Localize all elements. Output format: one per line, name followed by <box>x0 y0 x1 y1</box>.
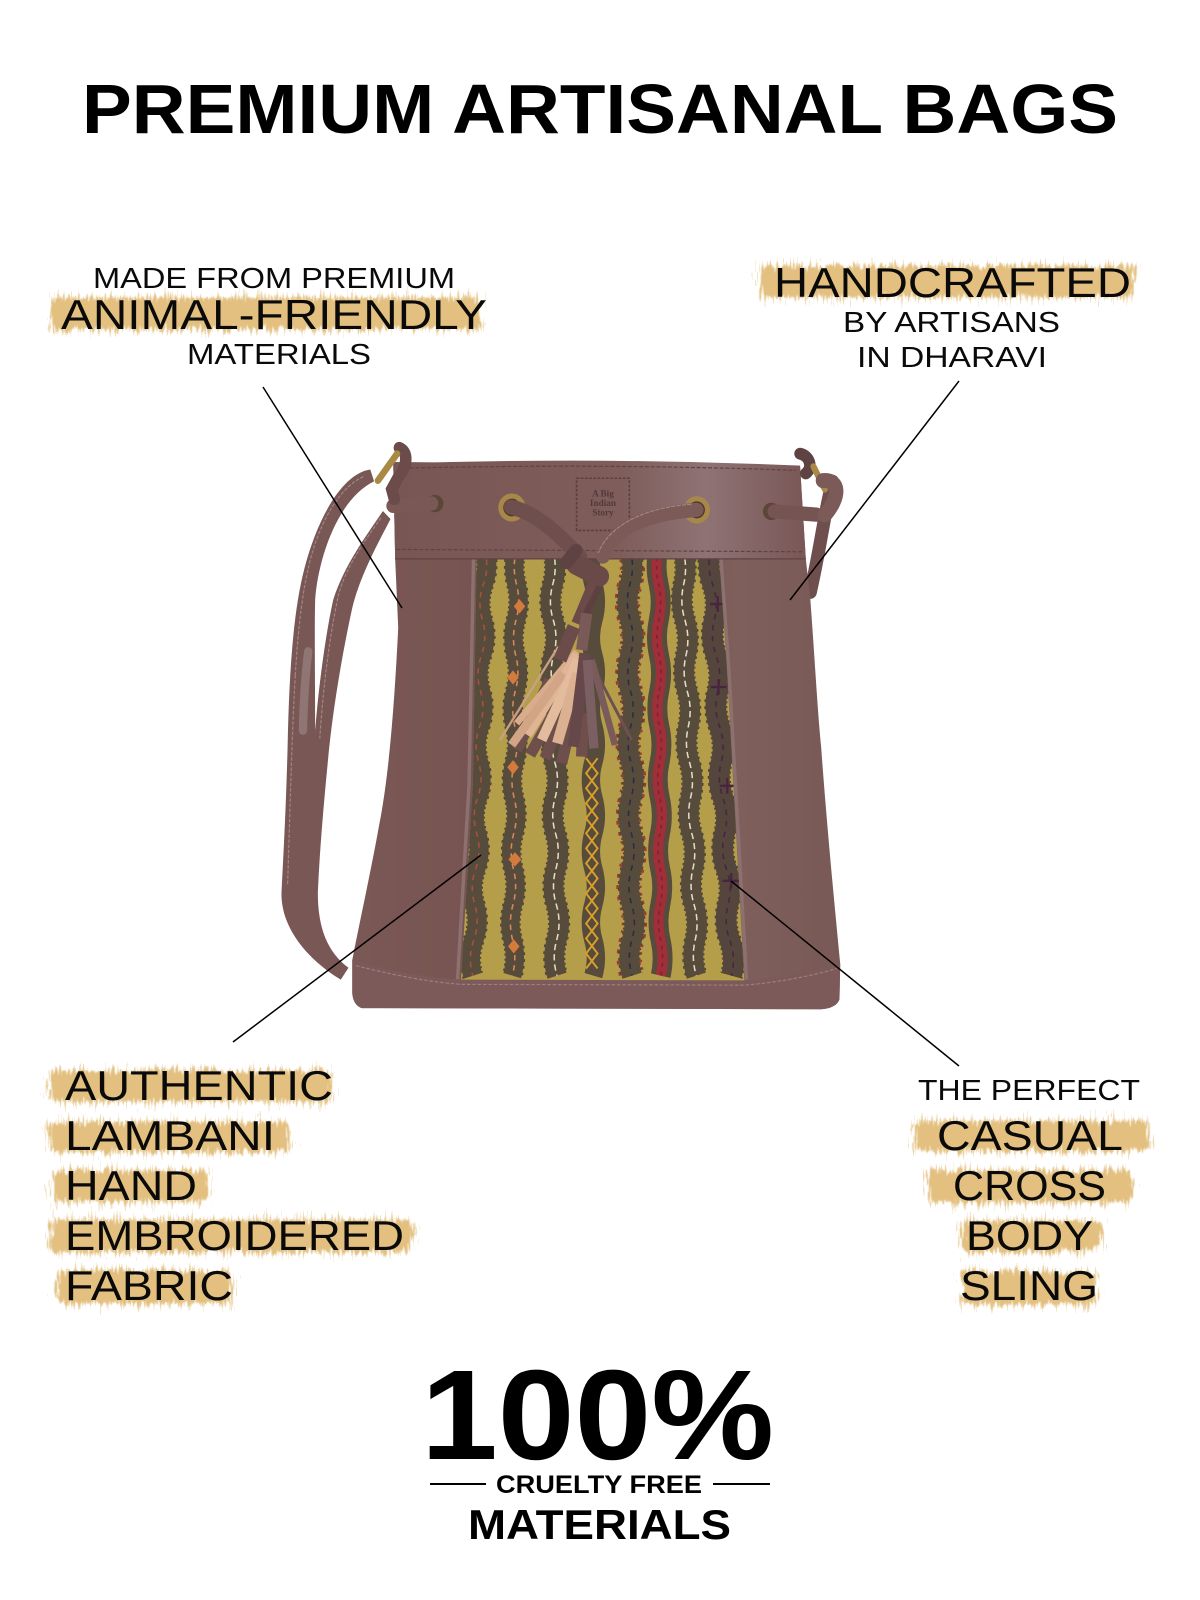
brush highlight: fabric <box>58 1271 231 1303</box>
cross stitch <box>586 758 598 969</box>
leader line: handcrafted <box>790 381 959 600</box>
top band <box>393 461 806 559</box>
brush highlight: body <box>962 1221 1100 1252</box>
text: cruelty free: CRUELTY FREE <box>496 1471 702 1499</box>
text: fabric: FABRIC <box>65 1262 233 1309</box>
text: casual: CASUAL <box>937 1112 1123 1159</box>
diamond motifs <box>507 599 525 954</box>
text: sling: SLING <box>960 1262 1098 1309</box>
callout: handcrafted <box>760 259 1134 374</box>
bag strap <box>281 470 833 980</box>
badge: 100% cruelty free materials <box>421 1344 774 1548</box>
brush highlight: lambani <box>50 1122 289 1152</box>
text: authentic: AUTHENTIC <box>65 1062 333 1109</box>
brush highlight: hand <box>53 1171 207 1201</box>
brush highlight: casual <box>915 1121 1149 1151</box>
tassel <box>500 583 632 763</box>
text: the perfect: THE PERFECT <box>918 1075 1140 1107</box>
text: lambani: LAMBANI <box>65 1112 275 1159</box>
product photo: leather bag illustration <box>281 448 840 1009</box>
brand stamp <box>577 478 629 530</box>
brush highlight <box>760 266 1134 297</box>
text: cross: CROSS <box>953 1162 1106 1209</box>
brand stamp: Story <box>592 508 614 518</box>
brush highlight: embroidered <box>50 1220 411 1252</box>
callout: authentic lambani fabric <box>50 1062 411 1309</box>
text: made from premium: MADE FROM PREMIUM <box>93 263 455 295</box>
brush highlight: authentic <box>50 1071 331 1101</box>
text: body: BODY <box>966 1212 1093 1259</box>
text: embroidered: EMBROIDERED <box>65 1212 404 1259</box>
brush highlight <box>52 298 480 329</box>
leader line: sling <box>731 881 959 1066</box>
text: in dharavi: IN DHARAVI <box>857 342 1047 374</box>
rule: left <box>430 1483 486 1485</box>
purple crosses <box>710 596 740 889</box>
text: animal-friendly: ANIMAL-FRIENDLY <box>61 291 487 338</box>
gold eyelets <box>501 496 707 521</box>
brush highlight: cross <box>928 1171 1132 1202</box>
title: PREMIUM ARTISANAL BAGS <box>82 70 1118 148</box>
leader line: lambani fabric <box>233 855 481 1042</box>
bag base band <box>352 960 840 1009</box>
side straps and rings <box>378 448 836 520</box>
number: 100%: 100% <box>421 1344 774 1487</box>
text: materials: MATERIALS <box>468 1501 731 1548</box>
brush highlight: sling <box>961 1272 1096 1304</box>
embroidered fabric panel <box>454 549 752 991</box>
drawstring cords <box>511 504 697 576</box>
text: materials: MATERIALS <box>187 339 371 371</box>
text: handcrafted: HANDCRAFTED <box>774 259 1131 306</box>
leader line: animal-friendly materials <box>263 387 402 608</box>
text: by artisans: BY ARTISANS <box>843 307 1060 339</box>
bag body <box>352 462 840 1009</box>
brand stamp: Indian <box>590 499 617 509</box>
text: hand: HAND <box>65 1162 197 1209</box>
brand stamp: A Big <box>592 489 614 499</box>
rule: right <box>713 1483 770 1485</box>
callout: casual cross body sling <box>915 1075 1149 1309</box>
panel seams <box>458 557 746 980</box>
callout: animal-friendly materials <box>52 263 487 371</box>
